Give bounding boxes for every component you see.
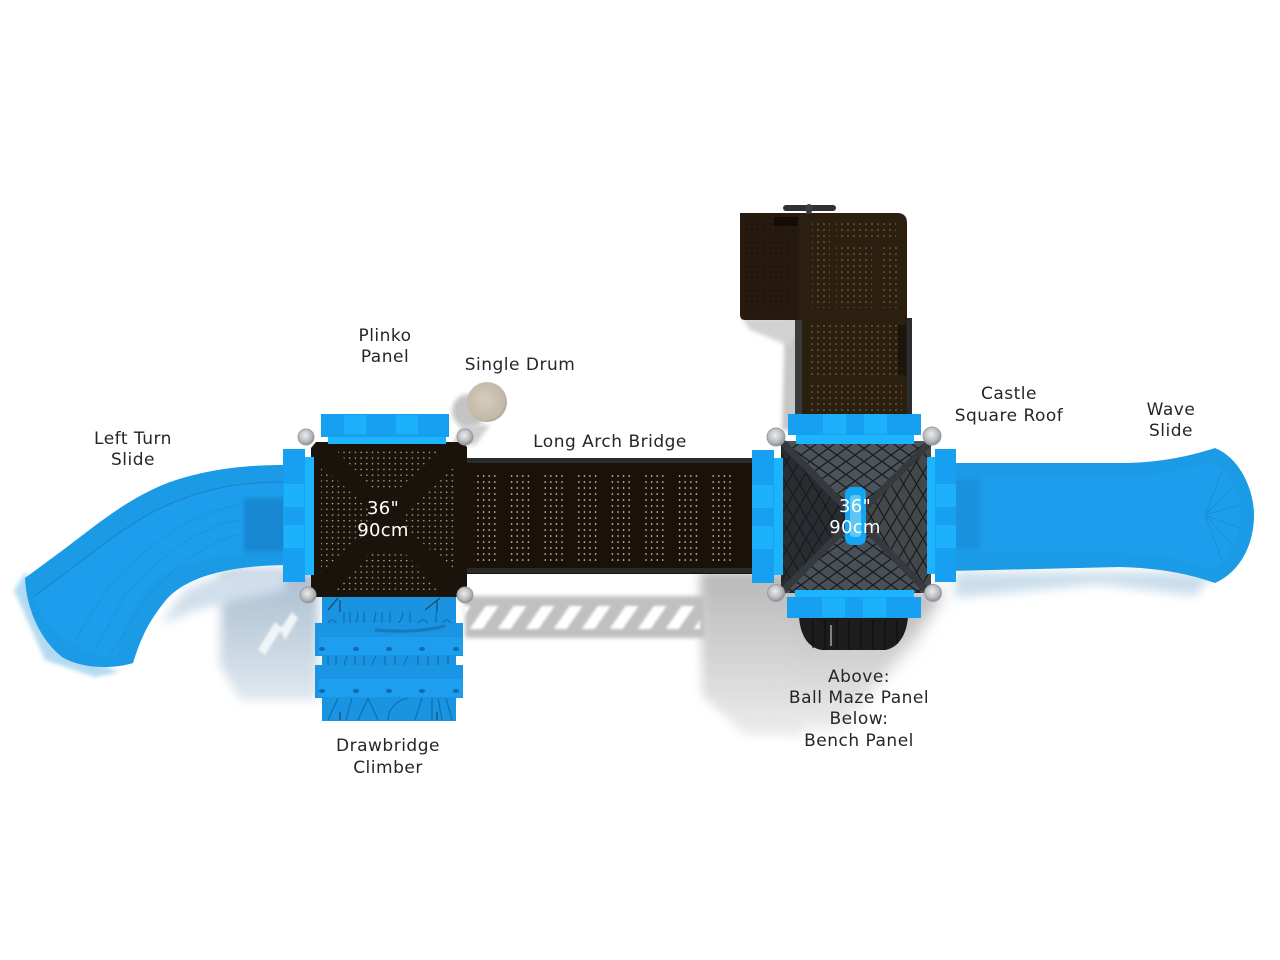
handle bbox=[783, 204, 836, 214]
label: plinko panel: Panel bbox=[361, 347, 409, 367]
drawbridge climber bbox=[315, 597, 463, 721]
label: single drum: Single Drum bbox=[465, 355, 575, 375]
label: ball maze and bench panel: Bench Panel bbox=[804, 731, 914, 751]
upper deck and ramp panel bbox=[740, 204, 912, 420]
posts bbox=[298, 427, 942, 603]
label: castle square roof: Square Roof bbox=[955, 406, 1064, 426]
single drum bbox=[467, 382, 507, 422]
ground shadows bbox=[14, 318, 1215, 735]
label: drawbridge climber: Climber bbox=[353, 758, 423, 778]
label: right deck height: 90cm bbox=[829, 517, 881, 538]
label: castle square roof: Castle bbox=[981, 384, 1037, 404]
right deck with lattice roof bbox=[780, 440, 932, 594]
label: wave slide: Slide bbox=[1149, 421, 1193, 441]
label: ball maze and bench panel: Above: bbox=[828, 667, 890, 687]
label: right deck height: 36" bbox=[839, 496, 871, 517]
left turn slide bbox=[25, 465, 286, 667]
label: drawbridge climber: Drawbridge bbox=[336, 736, 440, 756]
label: left turn slide: Left Turn bbox=[94, 429, 172, 449]
label: ball maze and bench panel: Ball Maze Panel bbox=[789, 688, 929, 708]
label: long arch bridge: Long Arch Bridge bbox=[533, 432, 687, 452]
label: ball maze and bench panel: Below: bbox=[830, 709, 888, 729]
label: left deck height: 36" bbox=[367, 498, 399, 519]
label: left deck height: 90cm bbox=[357, 520, 409, 541]
castle roof battlements: left deck bbox=[283, 414, 449, 582]
bench panel bbox=[799, 616, 908, 650]
ball maze capsule bbox=[845, 487, 866, 545]
label: plinko panel: Plinko bbox=[358, 326, 412, 346]
label: left turn slide: Slide bbox=[111, 450, 155, 470]
wave slide bbox=[950, 448, 1254, 583]
castle roof battlements: right deck bbox=[752, 414, 956, 618]
left deck bbox=[311, 442, 467, 597]
label: wave slide: Wave bbox=[1147, 400, 1195, 420]
long arch bridge bbox=[462, 458, 754, 574]
